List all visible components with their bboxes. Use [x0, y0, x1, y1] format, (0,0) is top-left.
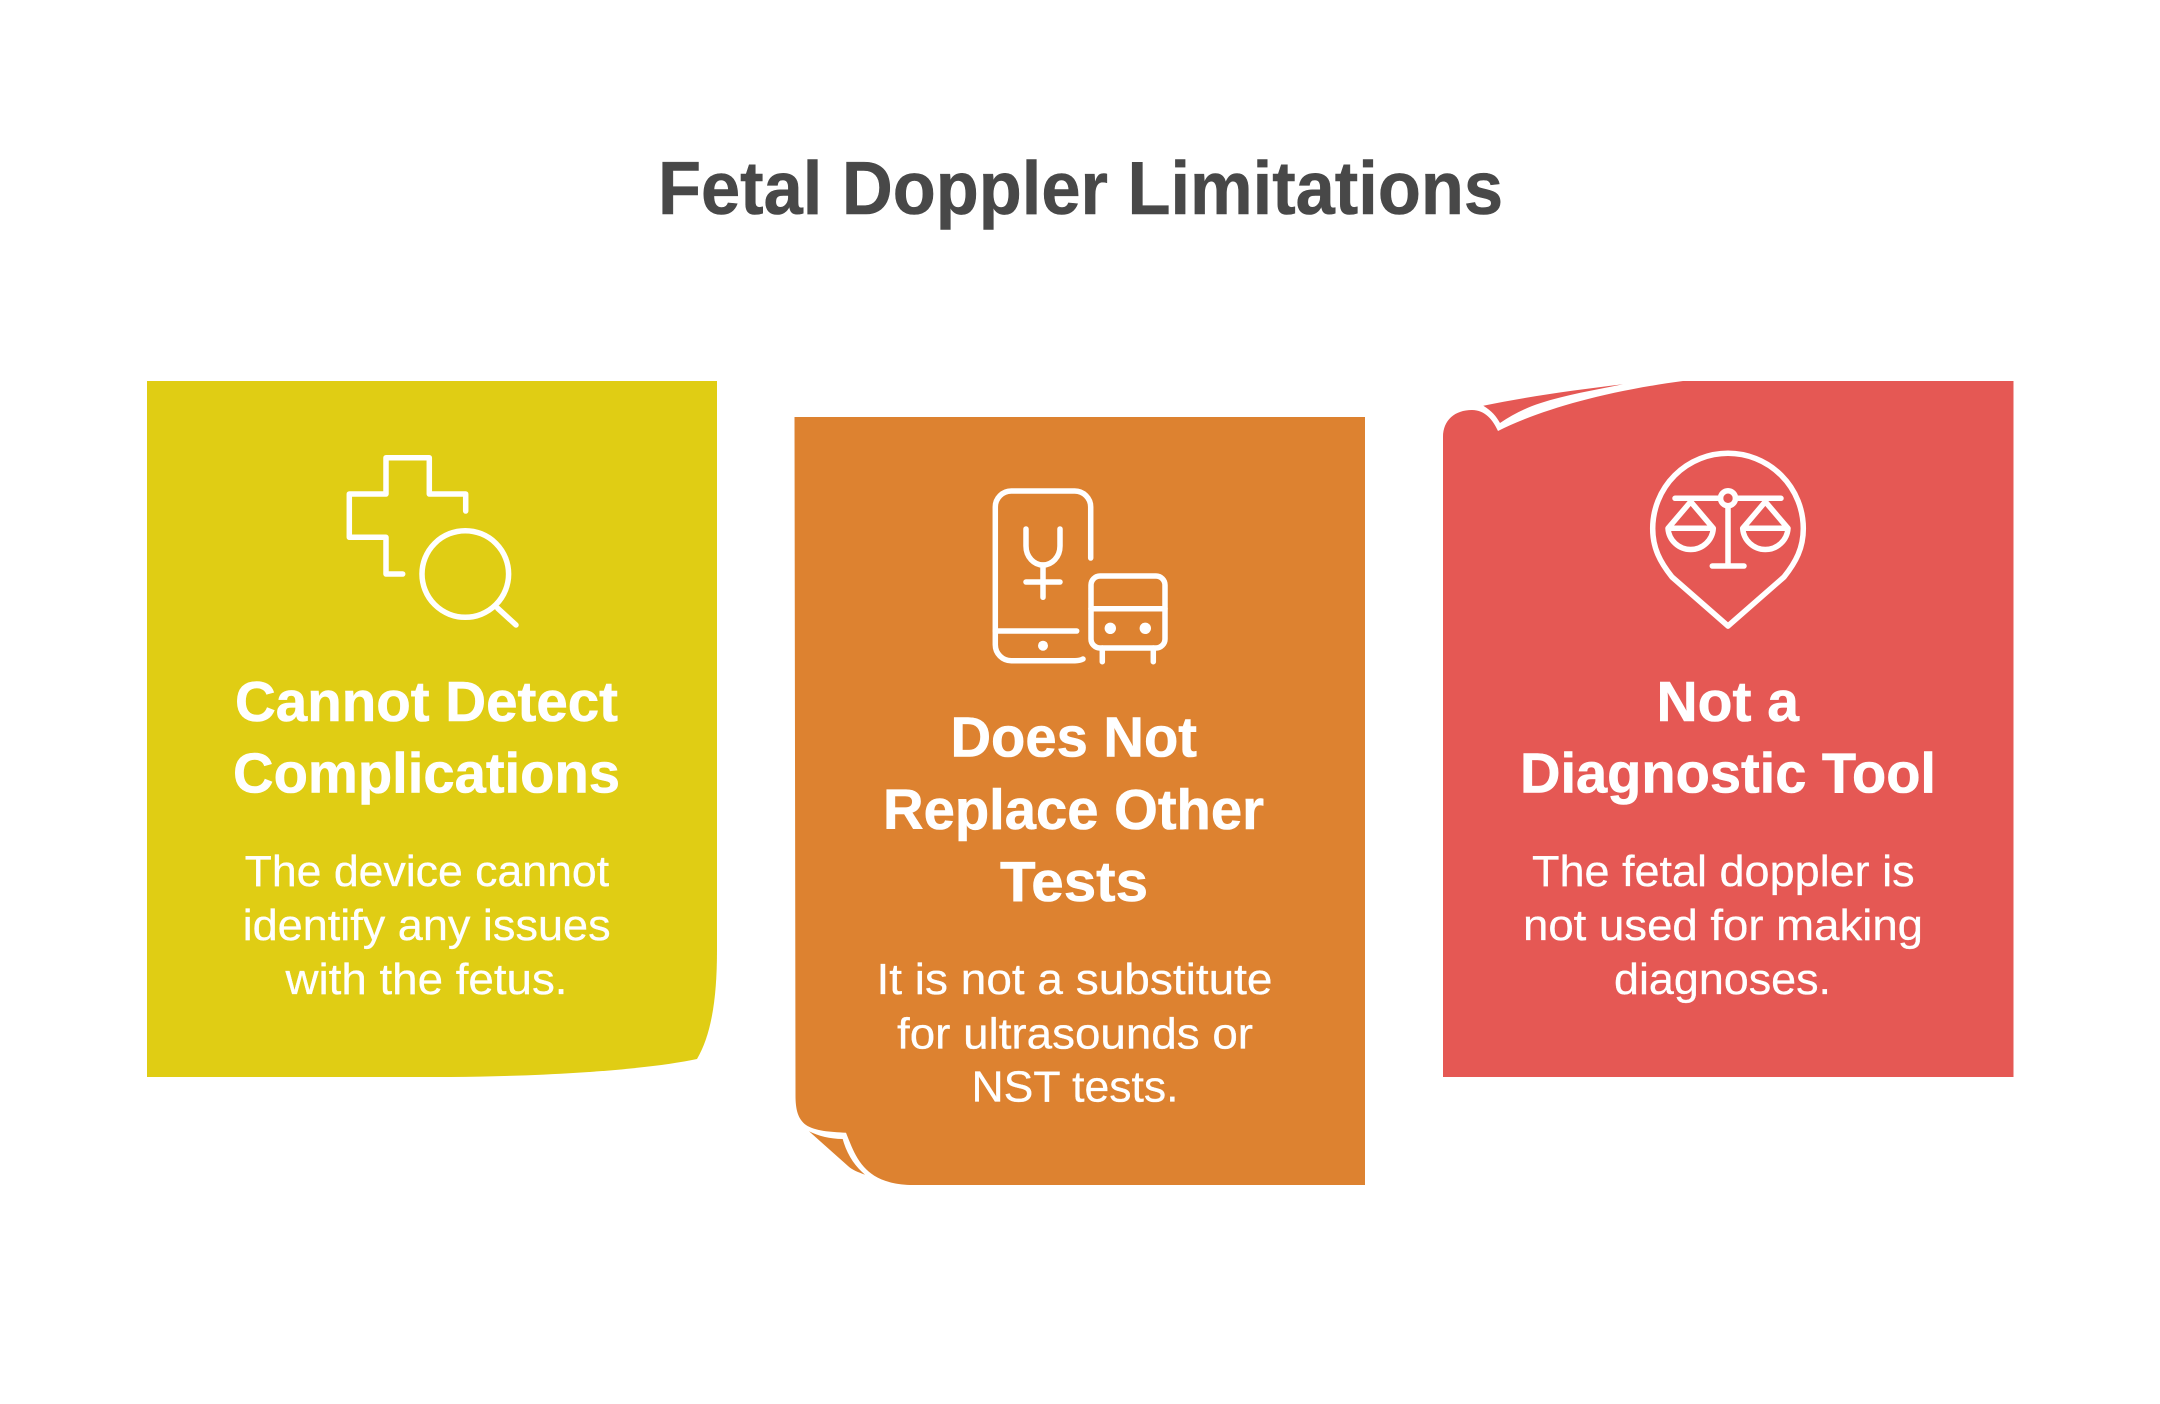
- body text: not a substitute for ultrasounds: It is not a substitute: [876, 955, 1272, 1004]
- heading: Not a Diagnostic Tool: [1520, 670, 1936, 805]
- card background: yellow with curled bottom-right corner: [147, 381, 717, 1077]
- body text: not a substitute for ultrasounds: for ultrasounds or: [897, 1009, 1253, 1058]
- body text: device cannot identify issues: [243, 847, 611, 1004]
- body text: not used for making diagnoses: diagnoses.: [1614, 955, 1831, 1004]
- icon: balance scale inside map pin: [1653, 453, 1803, 626]
- heading: Cannot Detect Complications: Complications: [233, 741, 620, 805]
- body text: not used for making diagnoses: not used for making: [1523, 901, 1923, 950]
- heading: Not a Diagnostic Tool: Not a: [1656, 670, 1800, 734]
- body text: not used for making diagnoses: [1523, 847, 1923, 1004]
- heading: Cannot Detect Complications: [233, 670, 620, 805]
- body text: device cannot identify issues: The device cannot: [245, 847, 609, 896]
- panel: cannot detect complications: [147, 381, 717, 1077]
- body text: device cannot identify issues: with the fetus.: [284, 955, 568, 1004]
- heading: Cannot Detect Complications: Cannot Detect: [235, 670, 618, 734]
- body text: device cannot identify issues: identify any issues: [243, 901, 611, 950]
- heading: Not a Diagnostic Tool: Diagnostic Tool: [1520, 741, 1936, 805]
- heading: Does Not Replace Other Tests: Does Not: [950, 706, 1197, 770]
- body text: not a substitute for ultrasounds: NST tests.: [972, 1063, 1178, 1112]
- icon: phone with fetal symbol and bus-shaped monitor: [995, 491, 1165, 662]
- body text: not used for making diagnoses: The fetal doppler is: [1532, 847, 1915, 896]
- card background: red with curled top-left corner: [1443, 381, 2014, 1077]
- page curl flap: [809, 1131, 865, 1175]
- panel: does not replace other tests: [794, 417, 1365, 1185]
- heading: Does Not Replace Other Tests: [883, 706, 1264, 914]
- panel: not a diagnostic tool: [1443, 381, 2014, 1077]
- card background: orange with curled bottom-left corner: [794, 417, 1365, 1185]
- heading: Does Not Replace Other Tests: Replace Other: [883, 778, 1264, 842]
- page curl flap: [1483, 384, 1623, 423]
- body text: not a substitute for ultrasounds: [876, 955, 1272, 1112]
- heading: Does Not Replace Other Tests: Tests: [1000, 850, 1148, 914]
- title: Fetal Doppler Limitations: [658, 146, 1503, 230]
- icon: medical cross with magnifying glass: [349, 458, 516, 625]
